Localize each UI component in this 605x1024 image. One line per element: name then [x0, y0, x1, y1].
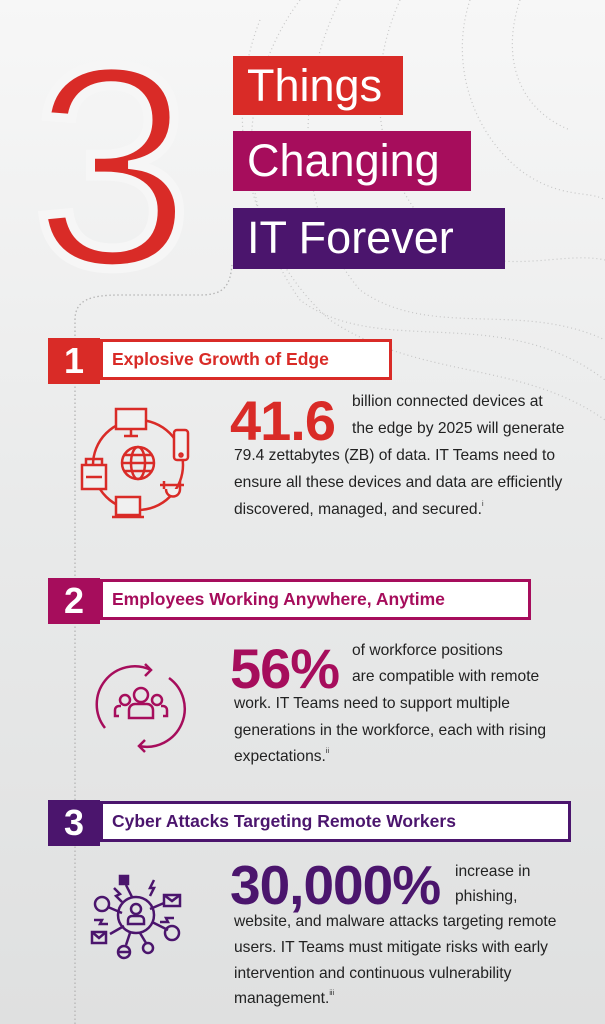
text block 3: website, and malware attacks targeting remote [234, 913, 556, 930]
number badge 3: 3 [64, 802, 84, 843]
text block 3: users. IT Teams must mitigate risks with early [234, 939, 548, 956]
text block 2: are compatible with remote [352, 668, 539, 685]
title: IT Forever: IT Forever [247, 212, 454, 263]
title: Things: Things [247, 60, 382, 111]
text block 3: increase in [455, 863, 530, 880]
title: Changing: Changing [247, 135, 440, 186]
text block 1: the edge by 2025 will generate [352, 420, 564, 437]
number badge 1 [48, 338, 100, 384]
stat 41.6: 41.6 [230, 389, 335, 452]
text block 1 [234, 393, 564, 518]
heading: Employees Working Anywhere, Anytime [100, 579, 531, 620]
text block 2 [234, 642, 546, 765]
heading: Cyber Attacks Targeting Remote Workers: Cyber Attacks Targeting Remote Workers [112, 811, 456, 831]
icon: cyber attack network [90, 874, 182, 960]
number badge 2 [48, 578, 100, 624]
number badge 2: 2 [64, 580, 84, 621]
stat 56%: 56% [230, 637, 339, 700]
text block 1: ensure all these devices and data are efficiently [234, 474, 562, 491]
number badge 1: 1 [64, 340, 84, 381]
heading: Cyber Attacks Targeting Remote Workers [100, 801, 571, 842]
heading: Explosive Growth of Edge [100, 339, 392, 380]
title: Changing [233, 131, 471, 191]
text block 3: phishing, [455, 888, 517, 905]
text block 2: work. IT Teams need to support multiple [234, 695, 510, 712]
text block 1: discovered, managed, and secured.i [234, 501, 484, 518]
title: IT Forever [233, 208, 505, 269]
text block 1: 79.4 zettabytes (ZB) of data. IT Teams need to [234, 447, 555, 464]
icon: people cycle [96, 663, 186, 753]
section 2 header [48, 578, 531, 624]
number badge 3 [48, 800, 100, 846]
text block 1: billion connected devices at [352, 393, 543, 410]
stat 30,000%: 30,000% [230, 854, 440, 916]
text block 3 [234, 863, 556, 1007]
icon: edge devices [80, 408, 190, 518]
text block 2: expectations.ii [234, 748, 329, 765]
title: Things [233, 56, 403, 115]
text block 2: generations in the workforce, each with rising [234, 722, 546, 739]
heading: Explosive Growth of Edge: Explosive Growth of Edge [112, 349, 329, 369]
text block 3: intervention and continuous vulnerability [234, 965, 511, 982]
text block 3: management.iii [234, 990, 334, 1007]
heading: Employees Working Anywhere, Anytime: Employees Working Anywhere, Anytime [112, 589, 445, 609]
text block 2: of workforce positions [352, 642, 503, 659]
section 3 header [48, 800, 571, 846]
section 1 header [48, 338, 392, 384]
